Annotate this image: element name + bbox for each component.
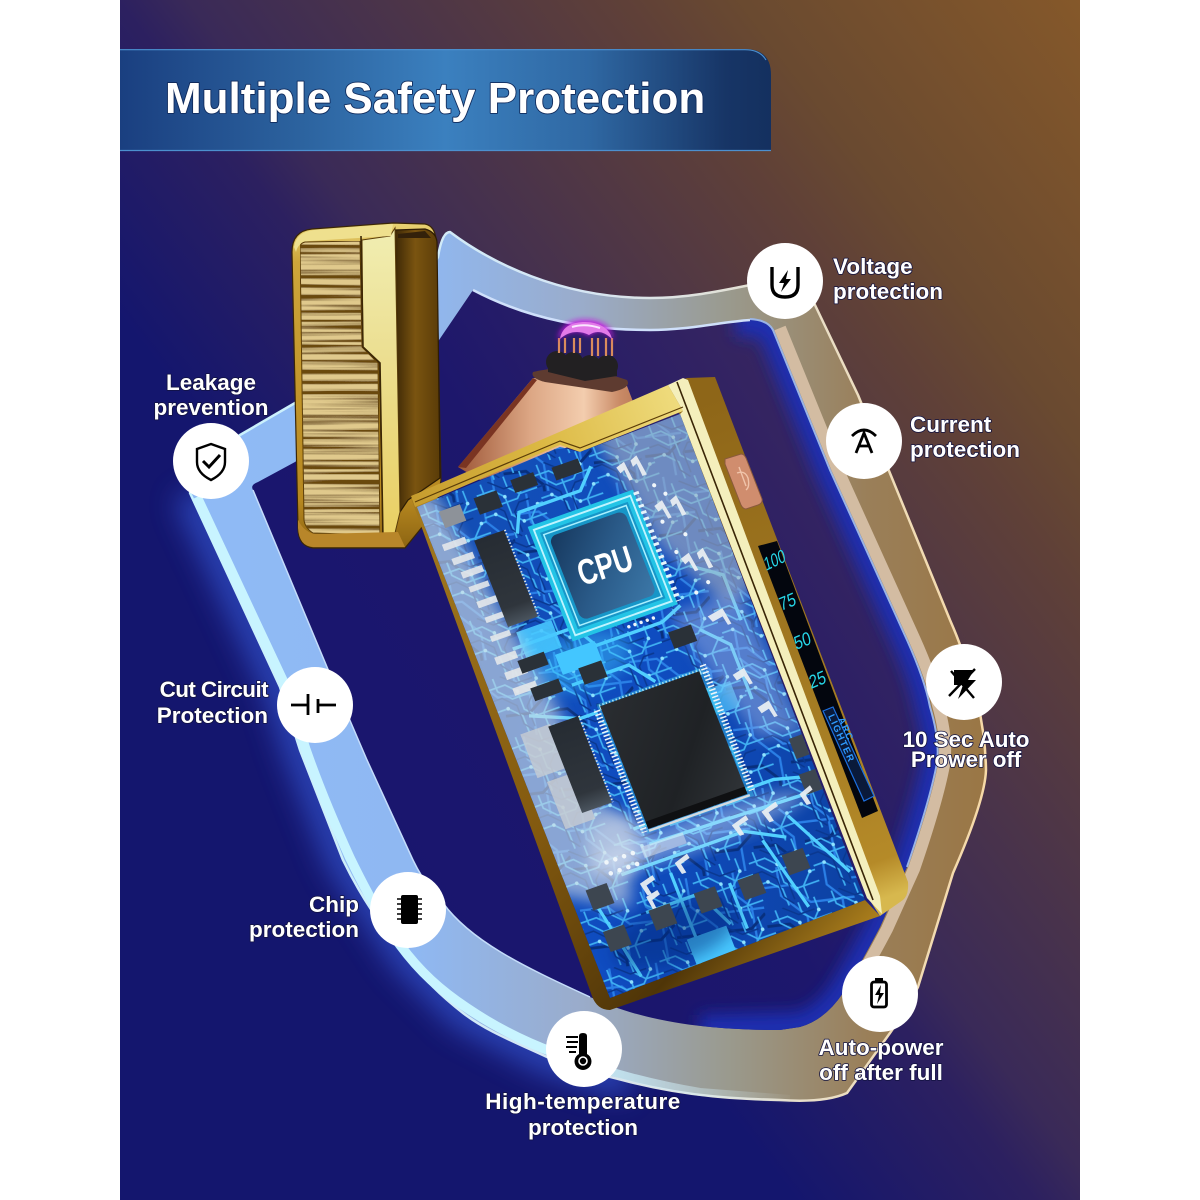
lid brushed panel [300, 241, 380, 535]
battery display: 25 [807, 666, 828, 693]
grey blocks [520, 721, 595, 832]
icon: capacitor [291, 694, 336, 715]
plasma arc [558, 320, 614, 340]
copper cone [458, 378, 640, 480]
gold side face [668, 377, 908, 916]
label: cut circuit protection: Cut Circuit [160, 677, 269, 702]
label: current protection: protection [910, 437, 1020, 462]
pin row [636, 492, 679, 601]
lid cream band [362, 228, 400, 540]
left dark chips [474, 530, 538, 627]
label: current protection: Current [910, 412, 992, 437]
label: chip protection: protection [249, 917, 359, 942]
icon: current [852, 430, 876, 453]
label: high-temperature protection: protection [528, 1115, 638, 1140]
icon: auto power off [949, 669, 976, 699]
label: leakage prevention: prevention [153, 395, 269, 420]
label: 10 sec auto power off: 10 Sec Auto [903, 727, 1029, 752]
ceramic base [532, 368, 628, 392]
CPU chip [528, 489, 680, 641]
battery display [758, 541, 878, 818]
label: chip protection: Chip [309, 892, 359, 917]
background panel [120, 0, 1080, 1200]
label: cut circuit protection: Protection [157, 703, 268, 728]
cream bevel [668, 378, 882, 914]
inner shield area [252, 290, 945, 1030]
battery display: 100 [762, 546, 788, 575]
battery display: 50 [792, 627, 813, 654]
callout: 10 sec auto power off [903, 644, 1029, 772]
lighter lid [292, 223, 441, 548]
shield ribbon [190, 232, 986, 1101]
label: auto-power off after full: off after full [819, 1060, 943, 1085]
label: high-temperature protection: High-temperature [485, 1089, 681, 1114]
icon: shield check [197, 444, 225, 480]
black posts [546, 351, 618, 381]
CPU label: CPU [572, 537, 638, 594]
gold top strip [411, 385, 683, 507]
label: 10 sec auto power off: Prower off [911, 747, 1022, 772]
label: voltage protection: protection [833, 279, 943, 304]
battery display: ARC [835, 716, 856, 743]
callout: current protection [826, 403, 1020, 479]
callout: high-temperature protection [485, 1011, 681, 1140]
bright traces [512, 466, 851, 978]
callout: auto-power off after full [819, 956, 944, 1085]
callout: cut circuit protection [157, 667, 353, 743]
icon: voltage [772, 267, 798, 297]
icon: thermometer [566, 1033, 592, 1070]
battery display: 75 [777, 588, 798, 615]
label: voltage protection: Voltage [833, 254, 913, 279]
grey film [417, 495, 644, 916]
lid dark inner face [395, 229, 440, 512]
circuit board screen [417, 414, 865, 998]
main processor chip [594, 665, 754, 834]
label: auto-power off after full: Auto-power [819, 1035, 944, 1060]
small chips [474, 458, 698, 702]
dot rows [604, 483, 710, 876]
title: Multiple Safety Protection [165, 74, 705, 123]
icon: chip [397, 895, 422, 924]
lower frame [411, 498, 880, 1010]
resistor rows [442, 532, 538, 700]
title banner [120, 49, 771, 151]
igniter head [458, 320, 640, 480]
lighter body [380, 377, 910, 1034]
power button [725, 454, 762, 509]
callout: chip protection [249, 872, 446, 948]
callout: leakage prevention [153, 370, 269, 499]
label: leakage prevention: Leakage [166, 370, 256, 395]
pins [559, 338, 612, 356]
battery display: LIGHTER [825, 713, 857, 765]
icon: battery [872, 978, 886, 1007]
callout: voltage protection [747, 243, 943, 319]
